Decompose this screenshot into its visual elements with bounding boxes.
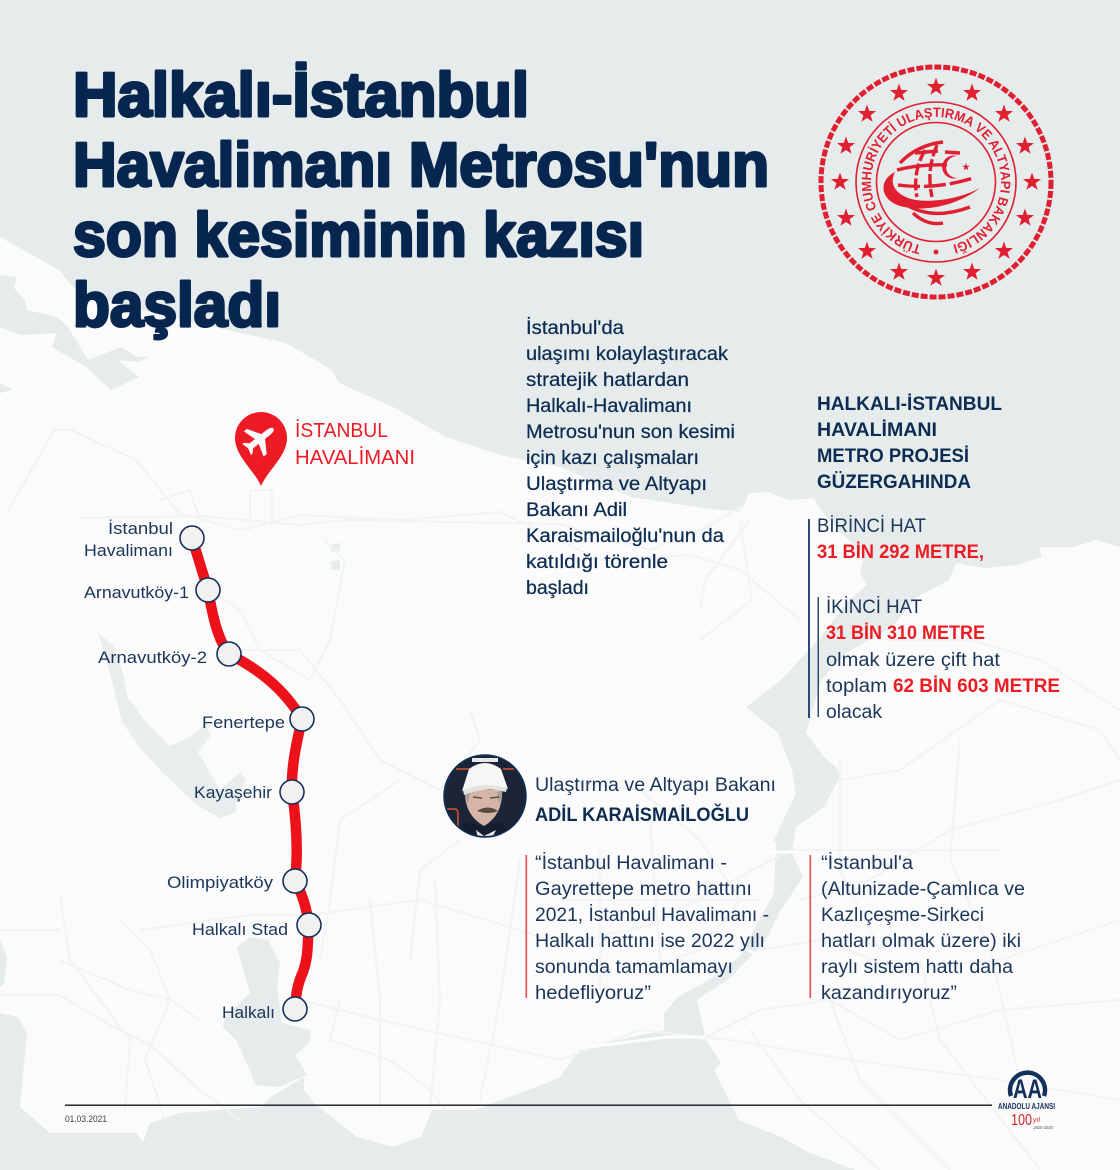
line lengths block: BİRİNCİ HAT (817, 516, 926, 537)
minister name: Ulaştırma ve Altyapı Bakanı (535, 775, 776, 796)
Anadolu Ajansi logo: 1920-2020 (1033, 1125, 1053, 1130)
intro paragraph: Ulaştırma ve Altyapı (526, 474, 707, 495)
footer rule (65, 1104, 992, 1106)
station labels: Halkalı (222, 1003, 275, 1022)
seal stars (831, 78, 1041, 286)
Anadolu Ajansi logo: yıl (1032, 1117, 1040, 1124)
date: 01.03.2021 (65, 1114, 107, 1125)
quote 1: Gayrettepe metro hattını (535, 879, 752, 900)
quote 1: sonunda tamamlamayı (535, 957, 733, 978)
quote 2: “İstanbul'a (821, 853, 913, 874)
minister name (535, 775, 776, 826)
line lengths block: İKİNCİ HAT (826, 597, 922, 618)
minister name: ADİL KARAİSMAİLOĞLU (535, 804, 749, 826)
quote 2: hatları olmak üzere) iki (821, 931, 1021, 952)
station labels: İstanbul (108, 519, 173, 538)
intro paragraph: Metrosu'nun son kesimi (526, 422, 735, 443)
station labels: Arnavutköy-2 (98, 648, 207, 667)
line lengths block: olmak üzere çift hat (826, 650, 1001, 671)
lakes (0, 275, 340, 1087)
seal globe emblem (884, 142, 980, 224)
quote 2: raylı sistem hattı daha (821, 957, 1013, 978)
line lengths block: toplam (826, 676, 887, 697)
land: Asian side (697, 540, 1120, 1170)
quote 1: 2021, İstanbul Havalimanı - (535, 905, 769, 926)
Anadolu Ajansi logo: AA (1013, 1074, 1042, 1104)
quote 1: “İstanbul Havalimanı - (535, 853, 727, 874)
Anadolu Ajansi logo: 100 (1011, 1112, 1032, 1129)
intro paragraph: stratejik hatlardan (526, 370, 689, 391)
route heading: METRO PROJESİ (817, 446, 969, 467)
quote 1: Halkalı hattını ise 2022 yılı (535, 931, 765, 952)
line lengths block: olacak (826, 702, 883, 723)
icon: airport pin (235, 412, 287, 486)
bridges (581, 852, 800, 1048)
title: Halkalı-İstanbul (73, 61, 529, 130)
route heading: HAVALİMANI (817, 420, 937, 441)
road network (0, 430, 1120, 1170)
quote 2: Kazlıçeşme-Sirkeci (821, 905, 984, 926)
quote 2 (810, 853, 1025, 1004)
land: European side (0, 237, 867, 1147)
airport label (295, 419, 415, 469)
route heading: GÜZERGAHINDA (817, 472, 971, 493)
line lengths block (808, 516, 1060, 723)
intro paragraph: İstanbul'da (526, 318, 624, 339)
title: son kesiminin kazısı (73, 201, 644, 270)
intro paragraph: katıldığı törenle (526, 552, 668, 573)
metro route line (192, 538, 309, 1009)
line lengths block: 31 BİN 310 METRE (826, 623, 985, 644)
stations (180, 526, 321, 1021)
title: başladı (73, 271, 281, 340)
intro paragraph: Halkalı-Havalimanı (526, 396, 692, 417)
Anadolu Ajansi logo: ANADOLU AJANSI (998, 1101, 1055, 1111)
intro paragraph: ulaşımı kolaylaştıracak (526, 344, 729, 365)
title: Havalimanı Metrosu'nun (73, 131, 769, 200)
quote 1 (526, 853, 769, 1004)
station labels (84, 519, 288, 1022)
station labels: Havalimanı (84, 541, 173, 560)
quote 2: kazandırıyoruz” (821, 983, 957, 1004)
seal ring text: TÜRKİYE CUMHURİYETİ ULAŞTIRMA VE ALTYAPI BAKANLIĞI (862, 108, 1010, 254)
route heading (817, 394, 1002, 493)
ministry seal (818, 64, 1054, 300)
quote 1: hedefliyoruz” (535, 983, 651, 1004)
quote 2: (Altunizade-Çamlıca ve (821, 879, 1025, 900)
intro paragraph: Karaismailoğlu'nun da (526, 526, 724, 547)
station labels: Fenertepe (202, 713, 285, 732)
intro paragraph: başladı (526, 578, 589, 599)
Anadolu Ajansi logo (998, 1073, 1055, 1130)
title (73, 61, 769, 340)
intro paragraph: için kazı çalışmaları (526, 448, 699, 469)
line lengths block: 62 BİN 603 METRE (893, 676, 1060, 697)
airport label: İSTANBUL (295, 419, 388, 442)
intro paragraph (526, 318, 735, 599)
line lengths block: 31 BİN 292 METRE, (817, 542, 984, 563)
route heading: HALKALI-İSTANBUL (817, 394, 1002, 415)
station labels: Olimpiyatköy (167, 873, 274, 892)
intro paragraph: Bakanı Adil (526, 500, 627, 521)
station labels: Halkalı Stad (192, 920, 288, 939)
airport label: HAVALİMANI (295, 446, 415, 469)
portrait of the minister (444, 755, 526, 838)
station labels: Kayaşehir (194, 783, 272, 802)
station labels: Arnavutköy-1 (84, 583, 189, 602)
